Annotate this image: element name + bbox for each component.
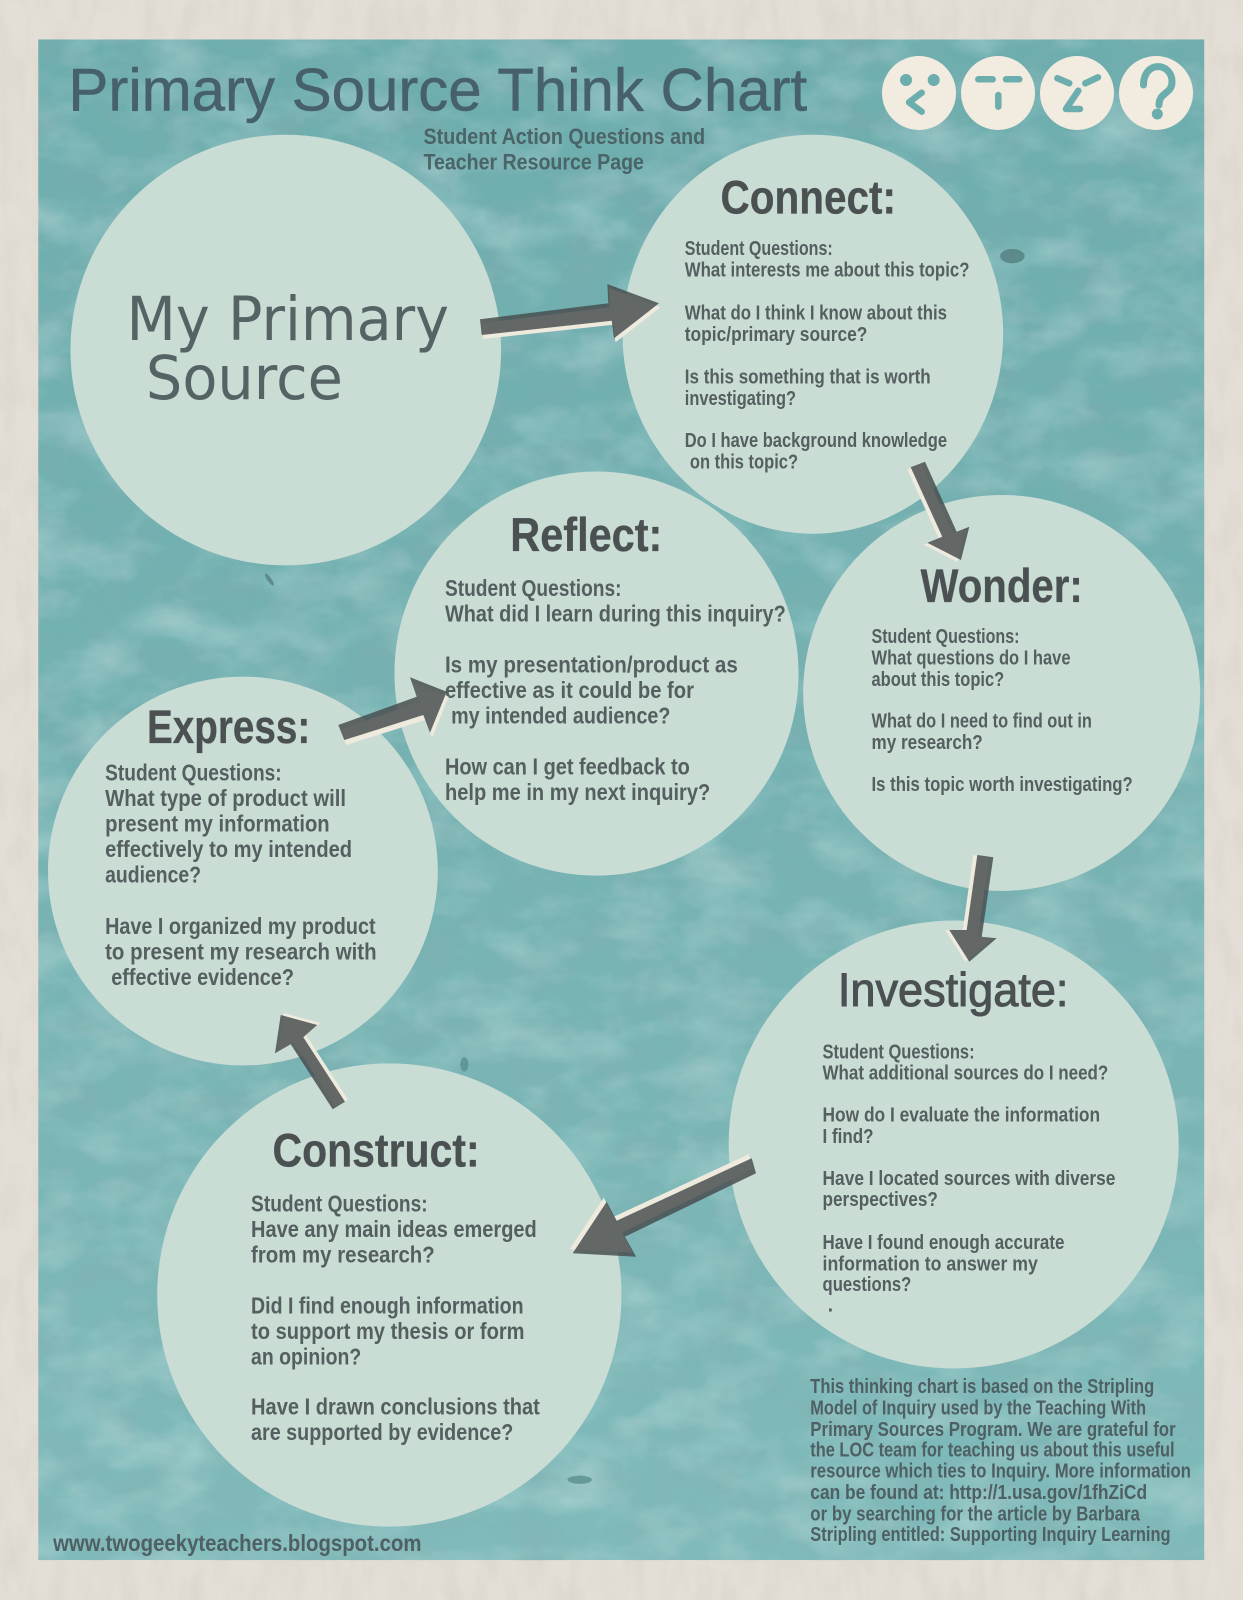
circle: reflect: Is my presentation/product as [445,652,738,678]
circle: construct: Student Questions: [251,1190,428,1216]
circle: express: Express: [147,701,310,753]
subtitle: Student Action Questions and [424,124,705,149]
circle: investigate: . [828,1294,833,1316]
circle: express: audience? [105,862,201,888]
circle: connect: What do I think I know about this [685,302,947,324]
arrow: source to connect [480,284,661,342]
circle: express: to present my research with [105,938,377,964]
attribution note: can be found at: http://1.usa.gov/1fhZiCd [810,1482,1147,1504]
circle: investigate: Student Questions: [823,1041,975,1063]
circle: investigate: I find? [823,1126,874,1148]
arrow: express to reflect [338,677,449,745]
subtitle [424,124,705,174]
circle: investigate: What additional sources do I need? [823,1063,1108,1085]
circle: express: Student Questions: [105,760,282,786]
circle: my primary source: Source [146,344,343,414]
circle: investigate: questions? [823,1274,911,1296]
circle: construct [157,1063,622,1527]
attribution note: or by searching for the article by Barbara [810,1504,1141,1526]
circle: construct: Did I find enough information [251,1292,524,1318]
circle: construct: from my research? [251,1241,435,1267]
arrow: connect to wonder [907,462,969,562]
circle: construct: an opinion? [251,1343,361,1369]
circle: reflect: How can I get feedback to [445,754,690,780]
icon: surprised face [882,56,956,130]
subtitle: Teacher Resource Page [424,149,644,174]
circle: wonder: What do I need to find out in [872,711,1092,733]
circle: express [48,677,438,1065]
circle: connect: topic/primary source? [685,324,867,346]
circle: investigate: Investigate: [838,964,1068,1016]
circle: wonder: Wonder: [921,560,1083,612]
circle: investigate: perspectives? [823,1189,938,1211]
circle: investigate [729,920,1179,1368]
icon: neutral face [961,56,1035,130]
attribution note: Model of Inquiry used by the Teaching With [810,1397,1146,1419]
circle: wonder: Student Questions: [872,626,1019,648]
circle: wonder: Is this topic worth investigating? [872,774,1133,796]
circle: reflect: effective as it could be for [445,677,694,703]
circle: investigate: How do I evaluate the information [823,1105,1100,1127]
circle: connect: What interests me about this topic? [685,260,969,282]
icon: angry face [1040,56,1114,130]
circle: connect: Student Questions: [685,238,833,260]
all arrows [275,284,997,1257]
attribution note [810,1376,1191,1546]
circle: reflect: Student Questions: [445,575,622,601]
circle: connect: investigating? [685,388,796,410]
circle: wonder: my research? [872,732,983,754]
attribution note: Primary Sources Program. We are grateful for [810,1419,1176,1441]
attribution note: Stripling entitled: Supporting Inquiry Learning [810,1524,1171,1546]
circle: express: effectively to my intended [105,836,352,862]
arrow: construct to express [275,1013,348,1109]
title: Primary Source Think Chart [68,57,807,124]
circle: investigate: Have I located sources with diverse [823,1168,1115,1190]
circle: reflect: help me in my next inquiry? [445,779,710,805]
arrow: wonder to investigate [945,855,997,962]
circle: connect: on this topic? [690,451,798,473]
circle: reflect [394,471,799,876]
circle: investigate: information to answer my [823,1254,1038,1276]
circle: connect: Connect: [720,171,896,223]
circle: wonder: about this topic? [872,669,1004,691]
circle: express: What type of product will [105,785,346,811]
circle: reflect: Reflect: [510,509,662,561]
attribution note: This thinking chart is based on the Stripling [810,1376,1154,1398]
circle: express: Have I organized my product [105,913,376,939]
circle: construct: Have any main ideas emerged [251,1216,537,1242]
face and question icons [882,56,1193,130]
circle: my primary source [70,135,501,565]
footer: website: www.twogeekyteachers.blogspot.com [52,1530,421,1556]
circle: connect: Is this something that is worth [685,367,931,389]
circle: investigate: Have I found enough accurate [823,1232,1064,1254]
circle: wonder [803,495,1200,891]
circle: reflect: What did I learn during this inquiry? [445,600,786,626]
circle: construct: Have I drawn conclusions that [251,1393,540,1419]
circle: wonder: What questions do I have [872,647,1071,669]
attribution note: the LOC team for teaching us about this useful [810,1439,1175,1461]
arrow: investigate to construct [570,1154,756,1257]
circle: construct: to support my thesis or form [251,1318,525,1344]
circle: connect: Do I have background knowledge [685,430,947,452]
circle: connect [623,135,1003,534]
circle: reflect: my intended audience? [451,703,670,729]
circle: express: present my information [105,811,330,837]
icon: question mark [1119,56,1193,130]
circle: construct: are supported by evidence? [251,1419,513,1445]
circle: construct: Construct: [272,1124,480,1176]
circle: my primary source: My Primary [127,285,449,355]
circle: express: effective evidence? [111,964,294,990]
